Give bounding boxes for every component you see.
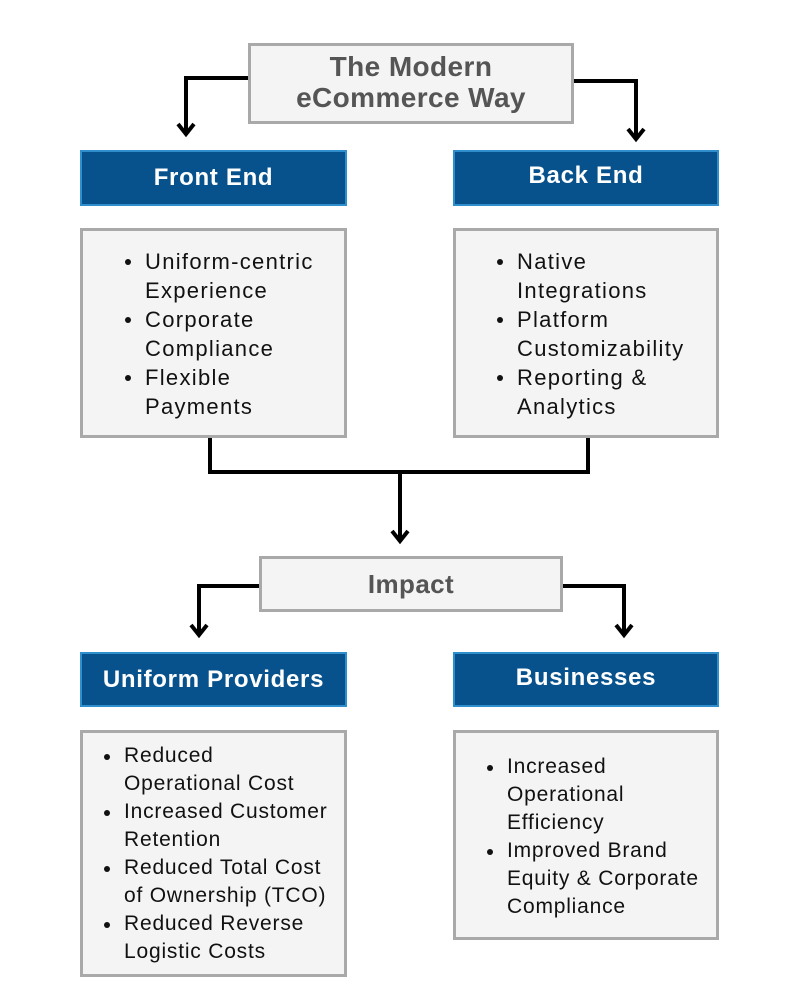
- panel: back end features: Native: [517, 249, 587, 274]
- panel: uniform provider impacts: Reduced: [124, 744, 214, 767]
- panel: business impacts: Operational: [507, 783, 624, 806]
- panel: back end features: Integrations: [517, 278, 648, 303]
- header: Uniform Providers: Uniform Providers: [103, 666, 324, 692]
- panel: back end features: [453, 228, 719, 438]
- panel: front end features: Compliance: [145, 336, 274, 361]
- panel: business impacts: Compliance: [507, 895, 626, 918]
- panel: uniform provider impacts: Reduced Reverse: [124, 912, 304, 935]
- panel: front end features: Payments: [145, 394, 253, 419]
- panel: front end features: Experience: [145, 278, 268, 303]
- panel: business impacts: [453, 730, 719, 940]
- panel: uniform provider impacts: Operational Cost: [124, 772, 294, 795]
- title: [248, 43, 574, 124]
- panel: business impacts: Improved Brand: [507, 839, 668, 862]
- panel: front end features: [80, 228, 347, 438]
- panel: uniform provider impacts: Increased Customer: [124, 800, 327, 823]
- header: Front End: [80, 150, 347, 206]
- panel: uniform provider impacts: Logistic Costs: [124, 940, 266, 963]
- header: Back End: [453, 150, 719, 206]
- panel: uniform provider impacts: of Ownership (TCO): [124, 884, 326, 907]
- panel: business impacts: Equity & Corporate: [507, 867, 699, 890]
- title: eCommerce Way: [296, 82, 526, 113]
- header: Uniform Providers: [80, 652, 347, 707]
- panel: business impacts: Efficiency: [507, 811, 604, 834]
- panel: front end features: Corporate: [145, 307, 255, 332]
- title: The Modern: [330, 51, 492, 82]
- header: Front End: Front End: [154, 164, 273, 191]
- panel: back end features: Customizability: [517, 336, 684, 361]
- header: Back End: Back End: [528, 162, 643, 189]
- panel: front end features: Uniform-centric: [145, 249, 314, 274]
- panel: business impacts: Increased: [507, 755, 606, 778]
- impact box: [259, 556, 563, 612]
- panel: front end features: Flexible: [145, 365, 231, 390]
- panel: back end features: Analytics: [517, 394, 617, 419]
- panel: uniform provider impacts: Reduced Total Cost: [124, 856, 321, 879]
- panel: back end features: Platform: [517, 307, 609, 332]
- panel: uniform provider impacts: [80, 730, 347, 977]
- panel: uniform provider impacts: Retention: [124, 828, 221, 851]
- header: Businesses: [453, 652, 719, 707]
- impact box: Impact: [368, 569, 454, 599]
- header: Businesses: Businesses: [516, 664, 656, 690]
- panel: back end features: Reporting &: [517, 365, 647, 390]
